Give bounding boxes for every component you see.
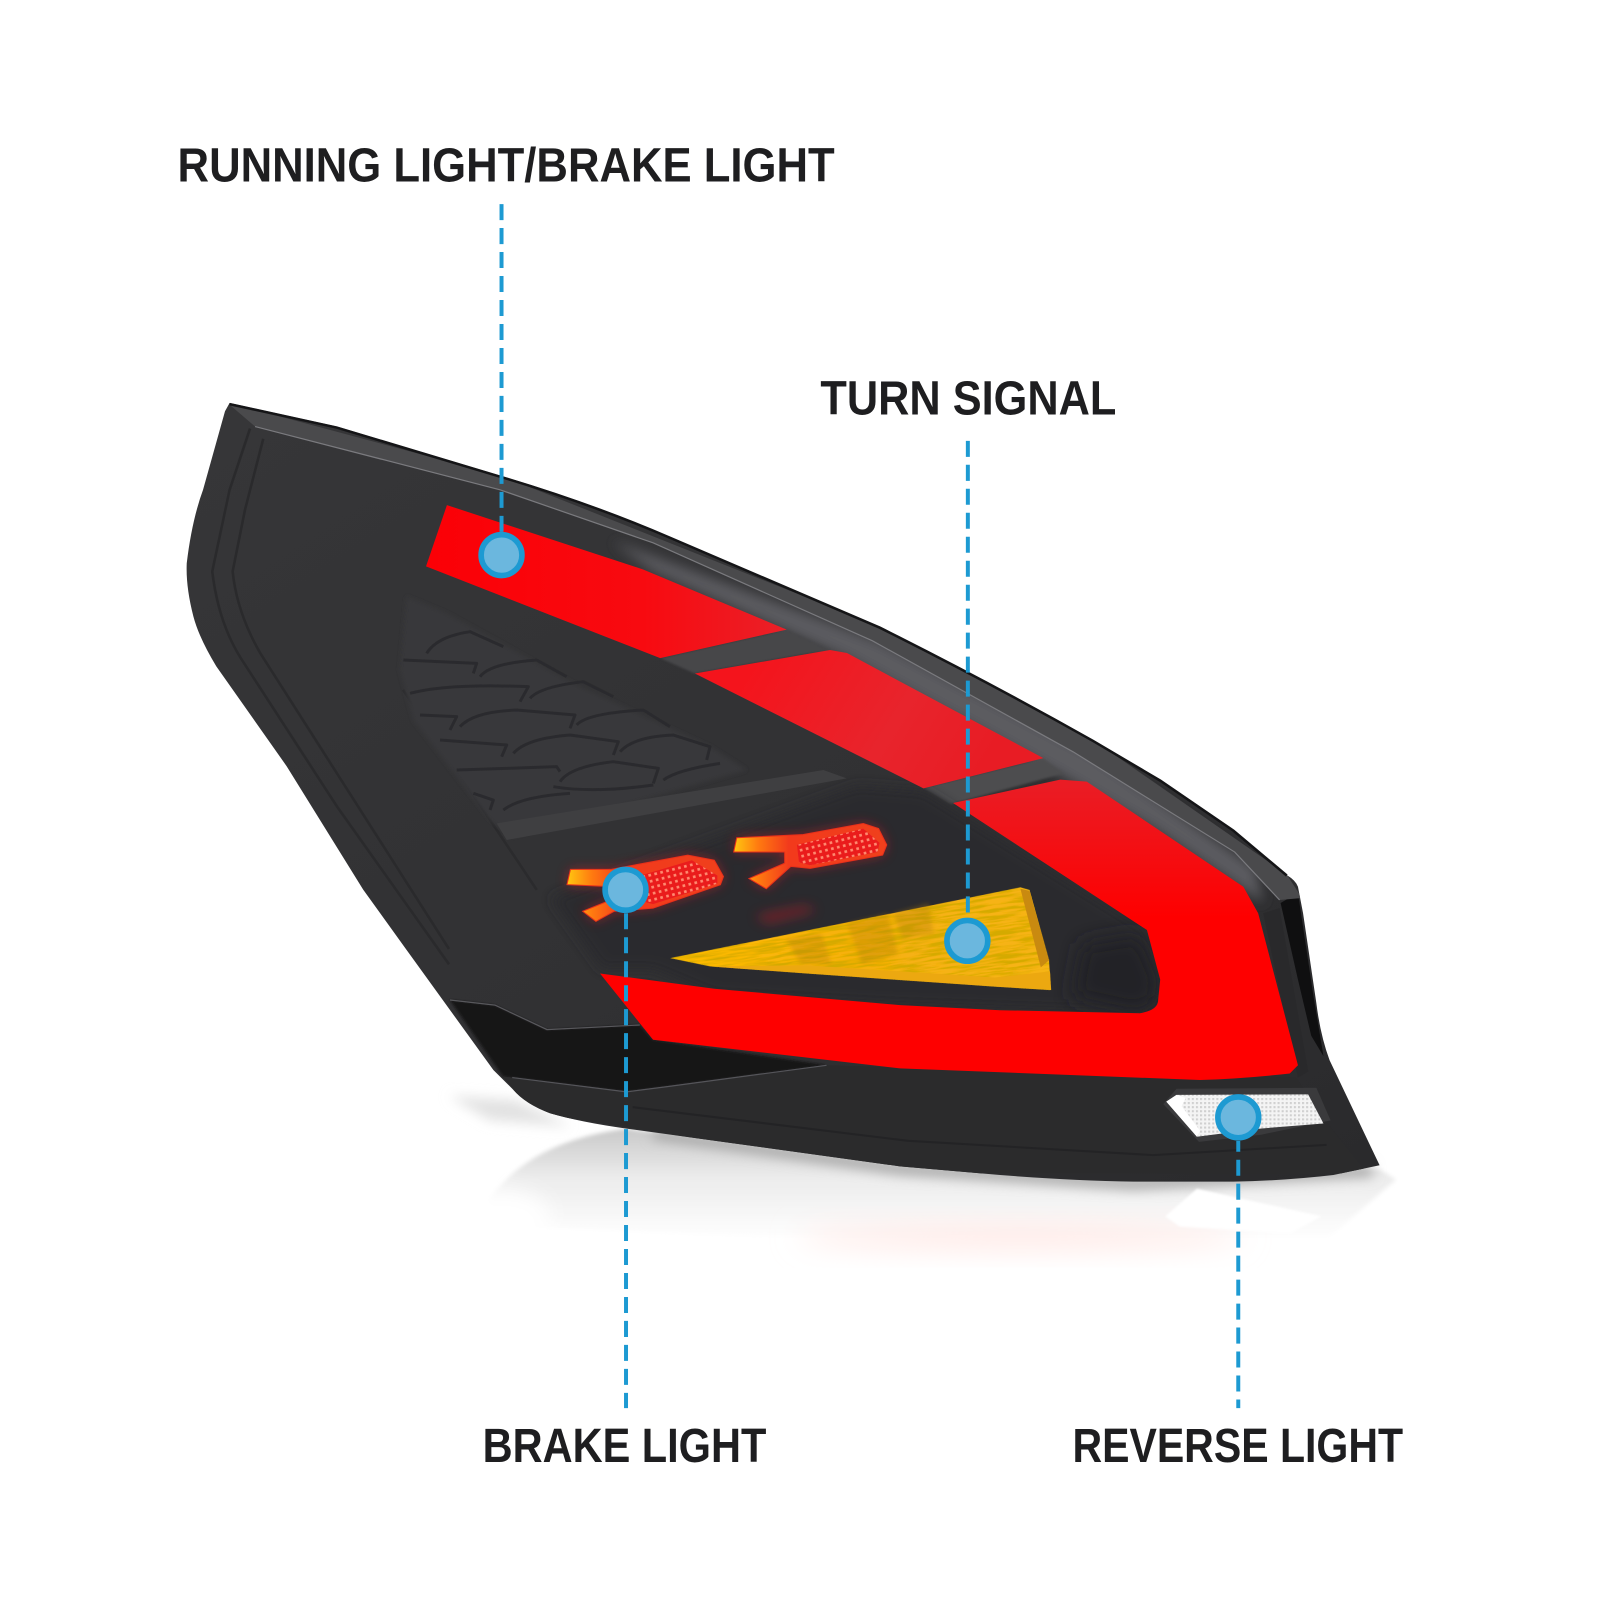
- marker: turn signal: [947, 920, 988, 961]
- smoked area above the strips: [612, 541, 1263, 903]
- turn signal lens: [656, 835, 1065, 1042]
- dotted lens left: [641, 860, 717, 904]
- brake light elements: [567, 823, 887, 922]
- leader line: turn signal: [966, 441, 970, 920]
- brake glow: [567, 823, 887, 922]
- top edge highlight: [230, 404, 1287, 876]
- label: turn signal: TURN SIGNAL: [820, 372, 1116, 425]
- marker: reverse light: [1218, 1097, 1259, 1138]
- textured honeycomb panel: [400, 597, 847, 840]
- tail light infographic: [180, 146, 1403, 1462]
- red light strip: middle segment: [695, 650, 1043, 788]
- marker: running light: [481, 535, 522, 576]
- housing ridges: [212, 427, 1327, 1155]
- marker: brake light: [605, 869, 646, 910]
- dotted lens right: [797, 829, 880, 865]
- red light strip: main L-shaped segment: [600, 780, 1298, 1080]
- red light strip: upper segment: [426, 505, 787, 658]
- leader line: running light / brake light: [500, 204, 503, 535]
- lower dark cavity: [566, 789, 951, 962]
- ground reflection and shadow: [449, 1096, 1396, 1250]
- brake element right: [734, 823, 887, 889]
- leader line: reverse light: [1236, 1141, 1240, 1408]
- tail light housing: [187, 402, 1380, 1182]
- label: reverse light: REVERSE LIGHT: [1072, 1420, 1403, 1473]
- brake element left: [567, 855, 723, 921]
- rim band: [227, 402, 1302, 900]
- leader line: brake light: [624, 913, 628, 1408]
- reverse light lens: [1163, 1088, 1331, 1142]
- label: brake light: BRAKE LIGHT: [483, 1420, 766, 1473]
- label: running light / brake light: RUNNING LIGHT/BRAKE LIGHT: [178, 140, 835, 193]
